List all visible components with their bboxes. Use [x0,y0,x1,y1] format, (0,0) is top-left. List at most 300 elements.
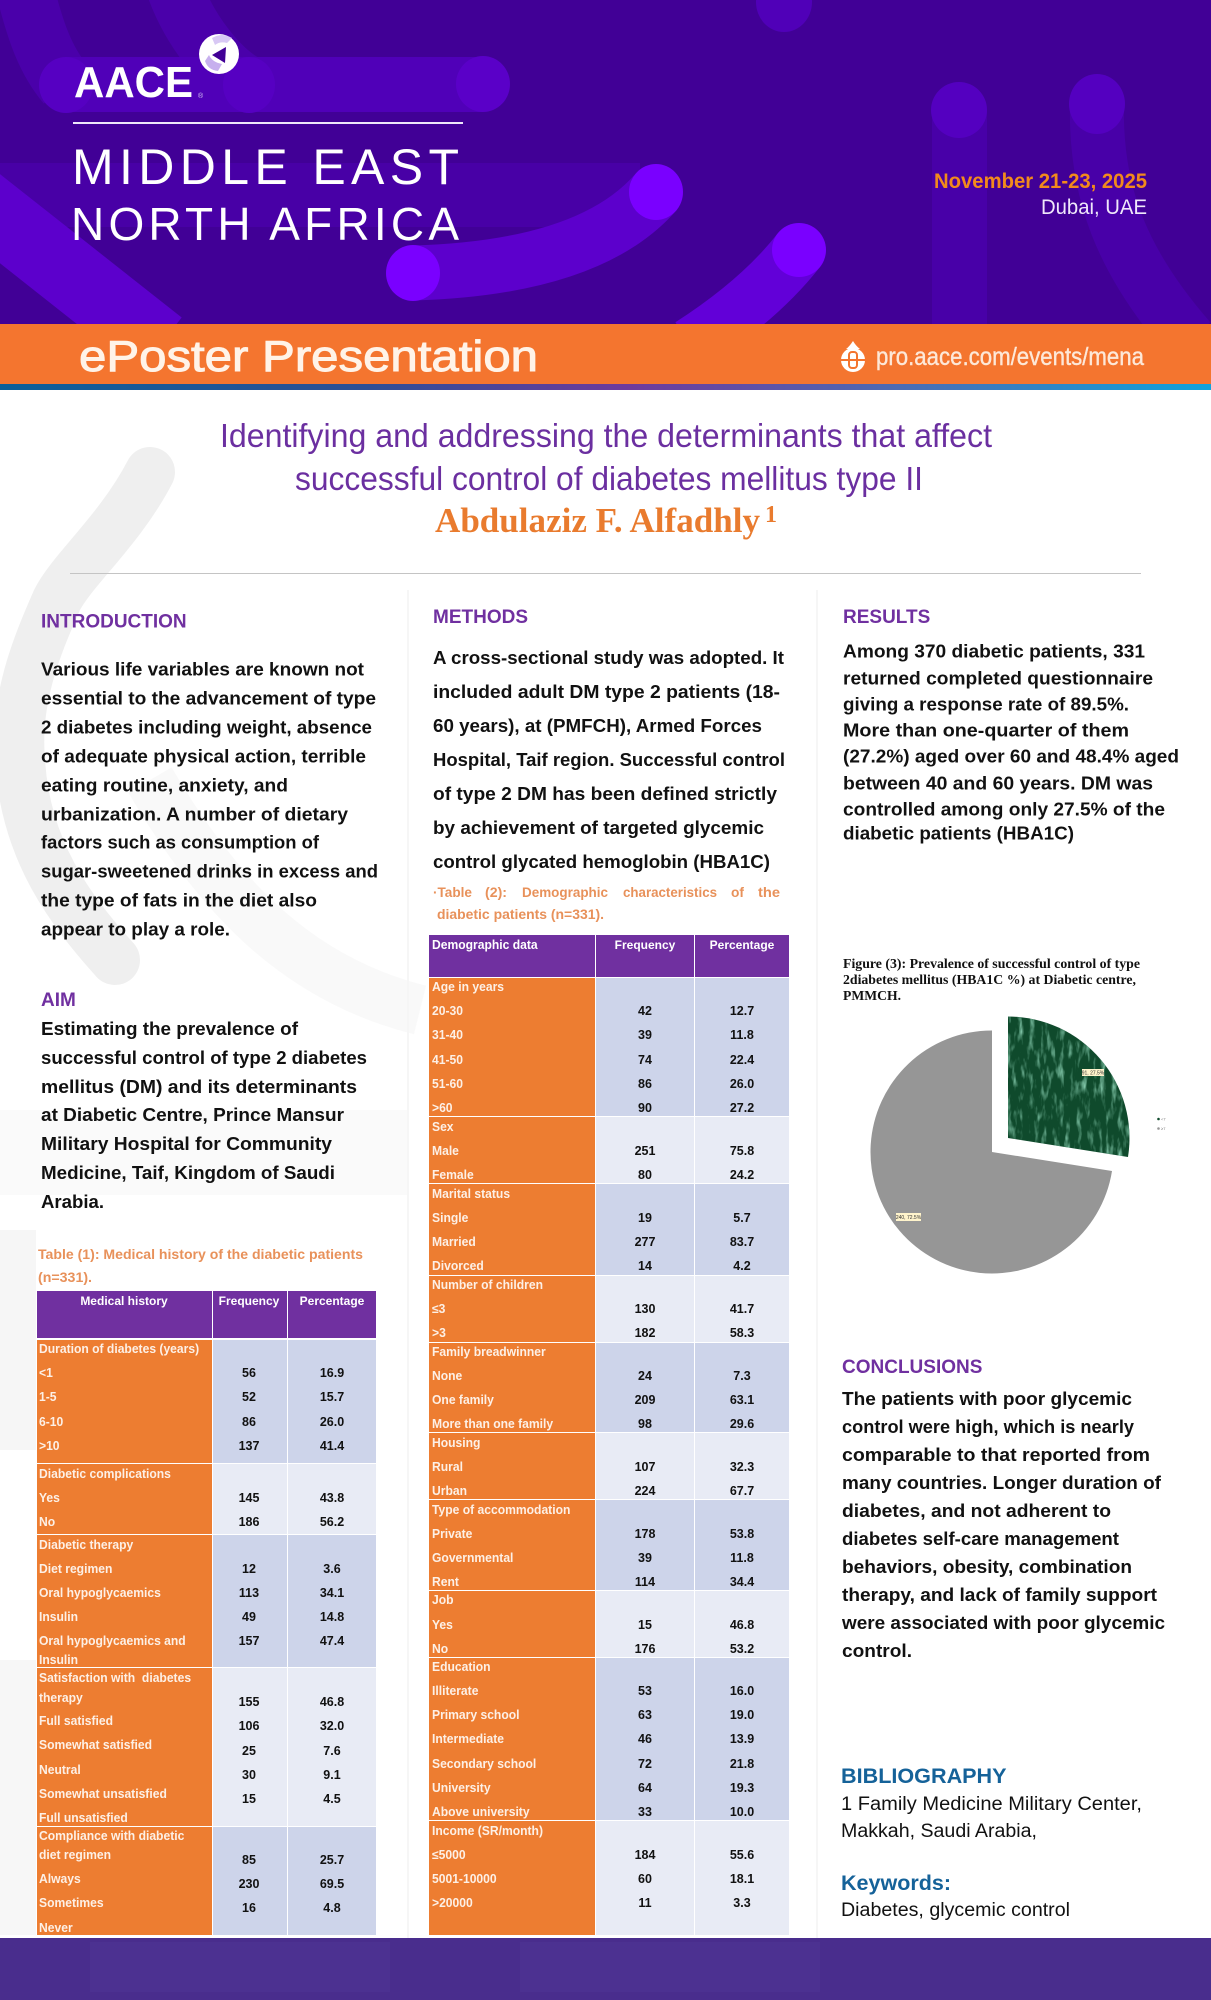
text: introduction body: of adequate physical action, terrible [41,746,366,766]
text: results body: diabetic patients (HBA1C) [843,824,1074,844]
caption: table 2: characteristics [623,884,717,900]
icon: AACE knot [199,34,239,74]
section: family breadwinner: 98 [638,1417,652,1431]
section: type of accommodation: 11.8 [730,1551,754,1565]
caption: table 2 [433,884,780,922]
section: duration of diabetes: 52 [242,1390,256,1404]
panel: aim [41,990,367,1212]
text: results body: More than one-quarter of them [843,720,1129,740]
table 2 header: Demographic data [432,938,538,952]
section: type of accommodation: 53.8 [730,1527,754,1541]
section: housing: Housing [432,1436,480,1450]
section: housing [429,1433,789,1499]
section: education: 53 [638,1684,652,1698]
text: conclusions body: therapy, and lack of family support [842,1585,1157,1605]
section: education: 33 [638,1805,652,1819]
table 2 header [429,935,789,977]
heading: results: RESULTS [843,607,930,628]
section: income [429,1821,789,1935]
pie chart: glycemic control [870,1010,1166,1274]
text: methods body: Hospital, Taif region. Successful control [433,750,785,770]
text: conclusions body: diabetes self-care management [842,1529,1119,1549]
caption: table 2: the [758,884,780,900]
panel: keywords [841,1870,1070,1921]
section: satisfaction with therapy: 46.8 [320,1695,344,1709]
table 2: demographic characteristics [429,935,789,1935]
section: education: 72 [638,1757,652,1771]
section: duration of diabetes: Duration of diabetes (years) [39,1342,199,1356]
section: diabetic therapy: 34.1 [320,1586,344,1600]
section: marital status: 277 [635,1235,655,1249]
section: type of accommodation [429,1500,789,1590]
text: introduction body: the type of fats in the diet also [41,890,317,910]
table 1 header: Medical history [80,1294,168,1308]
section: type of accommodation: 34.4 [730,1575,754,1589]
text: aim body: Arabia. [41,1192,104,1212]
section: duration of diabetes: 26.0 [320,1415,344,1429]
text: results body: Among 370 diabetic patients, 331 [843,642,1145,662]
section: diabetic therapy: Oral hypoglycaemics [39,1586,161,1600]
section: diabetic complications: 56.2 [320,1515,344,1529]
text: results body: controlled among only 27.5% of the [843,800,1165,820]
section: income: 60 [638,1872,652,1886]
section: number of children: 41.7 [730,1302,754,1316]
section: satisfaction with therapy: 7.6 [323,1744,341,1758]
section: satisfaction with therapy: Somewhat satisfied [39,1738,152,1752]
section: diabetic complications: 43.8 [320,1491,344,1505]
section: number of children: 58.3 [730,1326,754,1340]
text: conclusions body: control were high, which is nearly [842,1417,1134,1437]
text: aim body: Military Hospital for Community [41,1134,332,1154]
text: methods body: control glycated hemoglobin (HBA1C) [433,852,770,872]
section: number of children: 182 [635,1326,655,1340]
text: methods body: of type 2 DM has been defined strictly [433,784,777,804]
section: satisfaction with therapy: 155 [239,1695,259,1709]
section: family breadwinner: 29.6 [730,1417,754,1431]
section: diabetic complications: Yes [39,1491,60,1505]
text: methods body [433,648,785,872]
date and location [934,170,1147,219]
section: housing: Urban [432,1484,467,1498]
section: marital status [429,1184,789,1275]
section: compliance with diet: Compliance with diabetic [39,1829,184,1843]
section: income: 55.6 [730,1848,754,1862]
section: type of accommodation: Governmental [432,1551,513,1565]
section: marital status: 83.7 [730,1235,754,1249]
text: bibliography body: Makkah, Saudi Arabia, [841,1821,1037,1842]
author: Abdulaziz F. Alfadhly [435,501,760,540]
section: age: 12.7 [730,1004,754,1018]
section: compliance with diet: Sometimes [39,1896,104,1910]
section: job: No [432,1642,449,1656]
section: family breadwinner: More than one family [432,1417,553,1431]
section: diabetic complications: Diabetic complications [39,1467,171,1481]
section: satisfaction with therapy: 32.0 [320,1719,344,1733]
pie slice: uncontrolled [870,1030,1112,1274]
section: income: 18.1 [730,1872,754,1886]
section: age: 22.4 [730,1053,754,1067]
table 2 header: Frequency [615,938,676,952]
section: education: University [432,1781,491,1795]
section: number of children: 130 [635,1302,655,1316]
text: aim body [41,1019,367,1212]
section: number of children [429,1276,789,1342]
text: introduction body: appear to play a role. [41,920,230,940]
section: satisfaction with therapy: Full unsatisfied [39,1811,128,1825]
section: marital status: 19 [638,1211,652,1225]
section: satisfaction with therapy: therapy [39,1691,83,1705]
section: satisfaction with therapy: Satisfaction with diabetes [39,1671,191,1685]
section: duration of diabetes: 15.7 [320,1390,344,1404]
section: sex: 75.8 [730,1144,754,1158]
section: satisfaction with therapy: Somewhat unsatisfied [39,1787,167,1801]
section: number of children: Number of children [432,1278,543,1292]
section: education: 13.9 [730,1732,754,1746]
text: introduction body: essential to the advancement of type [41,688,376,708]
section: job: 53.2 [730,1642,754,1656]
text: conclusions body: many countries. Longer duration of [842,1473,1162,1493]
section: family breadwinner: 209 [635,1393,655,1407]
section: age: 26.0 [730,1077,754,1091]
text: conclusions body [841,1389,1165,1661]
section: diabetic complications: No [39,1515,56,1529]
section: age: 90 [638,1101,652,1115]
section: diabetic therapy: 47.4 [320,1634,344,1648]
heading: aim: AIM [41,990,76,1011]
section: sex: Female [432,1168,474,1182]
text: bibliography body [841,1794,1142,1842]
section: age: 51-60 [432,1077,463,1091]
header banner with tube artwork [0,0,1211,345]
section: job: Job [432,1593,454,1607]
text: results body: returned completed questionnaire [843,668,1153,688]
section: income: ≤5000 [432,1848,466,1862]
icon: web globe [841,341,865,372]
text: methods body: by achievement of targeted glycemic [433,818,764,838]
text: conclusions body: The patients with poor glycemic [842,1389,1132,1409]
section: education: 16.0 [730,1684,754,1698]
section: compliance with diet: 4.8 [323,1901,341,1915]
heading: bibliography: BIBLIOGRAPHY [841,1763,1007,1788]
text: conclusions body: were associated with poor glycemic [841,1613,1165,1633]
legend: ≥7 [1161,1126,1166,1131]
section: sex: 24.2 [730,1168,754,1182]
section: sex: Sex [432,1120,454,1134]
text: introduction body: 2 diabetes including weight, absence [41,718,372,738]
AACE logo: AACE [74,58,193,107]
text: methods body: 60 years), at (PMFCH), Armed Forces [433,716,762,736]
text: introduction body: sugar-sweetened drinks in excess and [41,862,378,882]
text: introduction body: urbanization. A number of dietary [41,804,348,824]
section: sex: 80 [638,1168,652,1182]
section: type of accommodation: Private [432,1527,473,1541]
caption: figure 3: Figure (3): Prevalence of successful control of type [843,956,1140,971]
section: diabetic therapy: 14.8 [320,1610,344,1624]
caption: table 1: (n=331). [38,1269,92,1285]
section: marital status: 14 [638,1259,652,1273]
section: age: Age in years [432,980,504,994]
section: compliance with diet: 230 [239,1877,259,1891]
section: education [429,1658,789,1820]
text: introduction body: factors such as consumption of [41,832,320,852]
section: type of accommodation: Type of accommodation [432,1503,570,1517]
section: satisfaction with therapy: 106 [239,1719,259,1733]
section: age [429,978,789,1116]
section: satisfaction with therapy: 4.5 [323,1792,341,1806]
text: keywords body: Diabetes, glycemic control [841,1900,1070,1921]
section: age: 31-40 [432,1028,463,1042]
divider [70,573,1141,574]
caption: figure 3 [843,956,1140,1003]
caption: table 2: of [731,884,744,900]
section: compliance with diet: Never [39,1921,73,1935]
section: marital status: 5.7 [733,1211,751,1225]
caption: table 2: diabetic patients (n=331). [437,906,604,922]
section: family breadwinner: Family breadwinner [432,1345,546,1359]
text: conclusions body: control. [842,1641,912,1661]
text: introduction body: Various life variables are known not [41,660,364,680]
section: family breadwinner: None [432,1369,462,1383]
table 1 header [37,1291,376,1338]
section: education: 10.0 [730,1805,754,1819]
section: education: 21.8 [730,1757,754,1771]
data label: uncontrolled: 240, 72.5% [896,1215,922,1221]
section: age: 41-50 [432,1053,463,1067]
section: education: 19.3 [730,1781,754,1795]
section: diabetic therapy: 157 [239,1634,259,1648]
section: duration of diabetes: 41.4 [320,1439,344,1453]
section: education: Primary school [432,1708,519,1722]
section: duration of diabetes: 6-10 [39,1415,63,1429]
title [220,417,992,497]
section: compliance with diet: diet regimen [39,1848,111,1862]
table 1 header: Frequency [219,1294,280,1308]
panel: methods [433,607,785,872]
section: type of accommodation: 39 [638,1551,652,1565]
text: conclusions body: comparable to that reported from [842,1445,1150,1465]
section: diabetic complications: 145 [239,1491,259,1505]
section: housing: 107 [635,1460,655,1474]
section: age: >60 [432,1101,453,1115]
section: diabetic therapy: 12 [242,1562,256,1576]
section: duration of diabetes: 86 [242,1415,256,1429]
section: income: >20000 [432,1896,473,1910]
section: type of accommodation: 178 [635,1527,655,1541]
gradient rule [0,384,1211,390]
section: diabetic therapy: Insulin [39,1610,78,1624]
text: introduction body: eating routine, anxiety, and [41,776,288,796]
section: job: Yes [432,1618,453,1632]
text: aim body: at Diabetic Centre, Prince Mansur [41,1105,344,1125]
section: compliance with diet: Always [39,1872,81,1886]
section: marital status: Marital status [432,1187,510,1201]
section: number of children: ≤3 [432,1302,446,1316]
section: family breadwinner: One family [432,1393,494,1407]
panel: results [843,607,1179,844]
section: compliance with diet: 69.5 [320,1877,344,1891]
legend: <7 [1161,1116,1166,1122]
section: type of accommodation: 114 [635,1575,655,1589]
section: compliance with diet: 25.7 [320,1853,344,1867]
section: income: 3.3 [733,1896,751,1910]
section: satisfaction with therapy [37,1668,376,1826]
section: number of children: >3 [432,1326,446,1340]
section: job: 15 [638,1618,652,1632]
text: conclusions body: behaviors, obesity, combination [842,1557,1132,1577]
section: satisfaction with therapy: Neutral [39,1763,81,1777]
section: diabetic complications: 186 [239,1515,259,1529]
title: successful control of diabetes mellitus type II [295,460,923,497]
section: age: 42 [638,1004,652,1018]
caption: figure 3: PMMCH. [843,988,901,1003]
section: duration of diabetes: >10 [39,1439,60,1453]
section: age: 27.2 [730,1101,754,1115]
caption: table 1: Table (1): Medical history of the diabetic patients [38,1246,363,1262]
table 1 header: Percentage [300,1294,365,1308]
section: diabetic therapy: Diet regimen [39,1562,112,1576]
section: sex: 251 [635,1144,655,1158]
section: age: 11.8 [730,1028,754,1042]
section: family breadwinner: 63.1 [730,1393,754,1407]
section: diabetic therapy: Insulin [39,1653,78,1667]
text: aim body: Estimating the prevalence of [41,1019,299,1039]
table 2 header: Percentage [710,938,775,952]
section: duration of diabetes: 1-5 [39,1390,57,1404]
section: diabetic therapy: Oral hypoglycaemics and [39,1634,186,1648]
section: compliance with diet: 85 [242,1853,256,1867]
section: satisfaction with therapy: 30 [242,1768,256,1782]
section: job [429,1591,789,1657]
conference name: MIDDLE EAST [72,139,459,195]
section: housing: 224 [635,1484,655,1498]
text: results body: between 40 and 60 years. DM was [843,774,1153,794]
section: age: 20-30 [432,1004,463,1018]
section: sex [429,1117,789,1183]
section: duration of diabetes: 16.9 [320,1366,344,1380]
conference name: NORTH AFRICA [71,198,459,250]
AACE logo: ® [198,92,204,100]
section: education: 64 [638,1781,652,1795]
table 1: medical history [37,1291,376,1935]
caption: table 2: ·Table [433,884,472,900]
text: methods body: included adult DM type 2 patients (18- [433,682,780,702]
section: education: Above university [432,1805,530,1819]
section: family breadwinner: 24 [638,1369,652,1383]
section: education: 19.0 [730,1708,754,1722]
section: compliance with diet: 16 [242,1901,256,1915]
section: compliance with diet [37,1827,376,1935]
section: diabetic complications [37,1464,376,1534]
section: diabetic therapy: 3.6 [323,1562,341,1576]
section: satisfaction with therapy: 25 [242,1744,256,1758]
section: education: Education [432,1660,491,1674]
section: housing: 32.3 [730,1460,754,1474]
section: job: 46.8 [730,1618,754,1632]
section: satisfaction with therapy: 9.1 [323,1768,341,1782]
orange eposter band [0,324,1211,384]
caption: figure 3: 2diabetes mellitus (HBA1C %) at Diabetic centre, [843,972,1136,987]
section: housing: 67.7 [730,1484,754,1498]
AACE logo [74,34,239,107]
text: bibliography body: 1 Family Medicine Military Center, [841,1794,1142,1815]
legend [1157,1116,1166,1131]
section: housing: Rural [432,1460,463,1474]
section: marital status: Married [432,1235,476,1249]
section: education: 46 [638,1732,652,1746]
divider under logo [73,122,463,124]
section: duration of diabetes: <1 [39,1366,53,1380]
caption: table 1 [38,1246,363,1285]
section: income: 5001-10000 [432,1872,497,1886]
heading: introduction: INTRODUCTION [41,612,187,632]
page background watermark [0,390,1211,1938]
orange eposter band: pro.aace.com/events/mena [876,343,1144,371]
section: type of accommodation: Rent [432,1575,459,1589]
section: satisfaction with therapy: 15 [242,1792,256,1806]
section: marital status: Single [432,1211,468,1225]
section: education: Secondary school [432,1757,536,1771]
text: aim body: mellitus (DM) and its determinants [41,1077,357,1097]
footer band [0,1938,1211,2000]
text: results body: (27.2%) aged over 60 and 48.4% aged [843,746,1179,766]
text: aim body: successful control of type 2 diabetes [41,1048,367,1068]
section: sex: Male [432,1144,459,1158]
section: diabetic therapy: 49 [242,1610,256,1624]
pie slice: controlled [1008,1016,1130,1157]
section: family breadwinner: 7.3 [733,1369,751,1383]
section: income: Income (SR/month) [432,1824,543,1838]
panel: conclusions [841,1357,1165,1661]
text: conclusions body: diabetes, and not adherent to [842,1501,1111,1521]
title: Identifying and addressing the determinants that affect [220,417,992,454]
text: results body: giving a response rate of 89.5%. [843,694,1129,714]
panel: introduction [41,612,378,940]
section: income: 184 [635,1848,655,1862]
text: aim body: Medicine, Taif, Kingdom of Saudi [41,1163,335,1183]
author: 1 [765,502,777,528]
section: job: 176 [635,1642,655,1656]
text: introduction body [41,660,378,940]
section: family breadwinner [429,1343,789,1432]
section: income: 11 [638,1896,652,1910]
section: age: 86 [638,1077,652,1091]
conference name [71,139,459,250]
caption: table 2: (2): [485,884,507,900]
text: methods body: A cross-sectional study was adopted. It [433,648,784,668]
panel: bibliography [841,1763,1142,1842]
section: duration of diabetes [37,1340,376,1463]
date and location: Dubai, UAE [1041,196,1147,219]
section: diabetic therapy [37,1535,376,1667]
section: duration of diabetes: 137 [239,1439,259,1453]
section: diabetic therapy: 113 [239,1586,259,1600]
section: diabetic therapy: Diabetic therapy [39,1538,133,1552]
heading: methods: METHODS [433,607,528,628]
heading: conclusions: CONCLUSIONS [842,1357,982,1378]
section: education: 63 [638,1708,652,1722]
section: age: 74 [638,1053,652,1067]
section: marital status: Divorced [432,1259,484,1273]
section: satisfaction with therapy: Full satisfied [39,1714,113,1728]
section: marital status: 4.2 [733,1259,751,1273]
section: age: 39 [638,1028,652,1042]
section: education: Intermediate [432,1732,504,1746]
heading: keywords: Keywords: [841,1870,951,1895]
caption: table 2: Demographic [522,884,608,900]
date and location: November 21-23, 2025 [934,170,1147,193]
text: results body [843,642,1179,844]
section: duration of diabetes: 56 [242,1366,256,1380]
